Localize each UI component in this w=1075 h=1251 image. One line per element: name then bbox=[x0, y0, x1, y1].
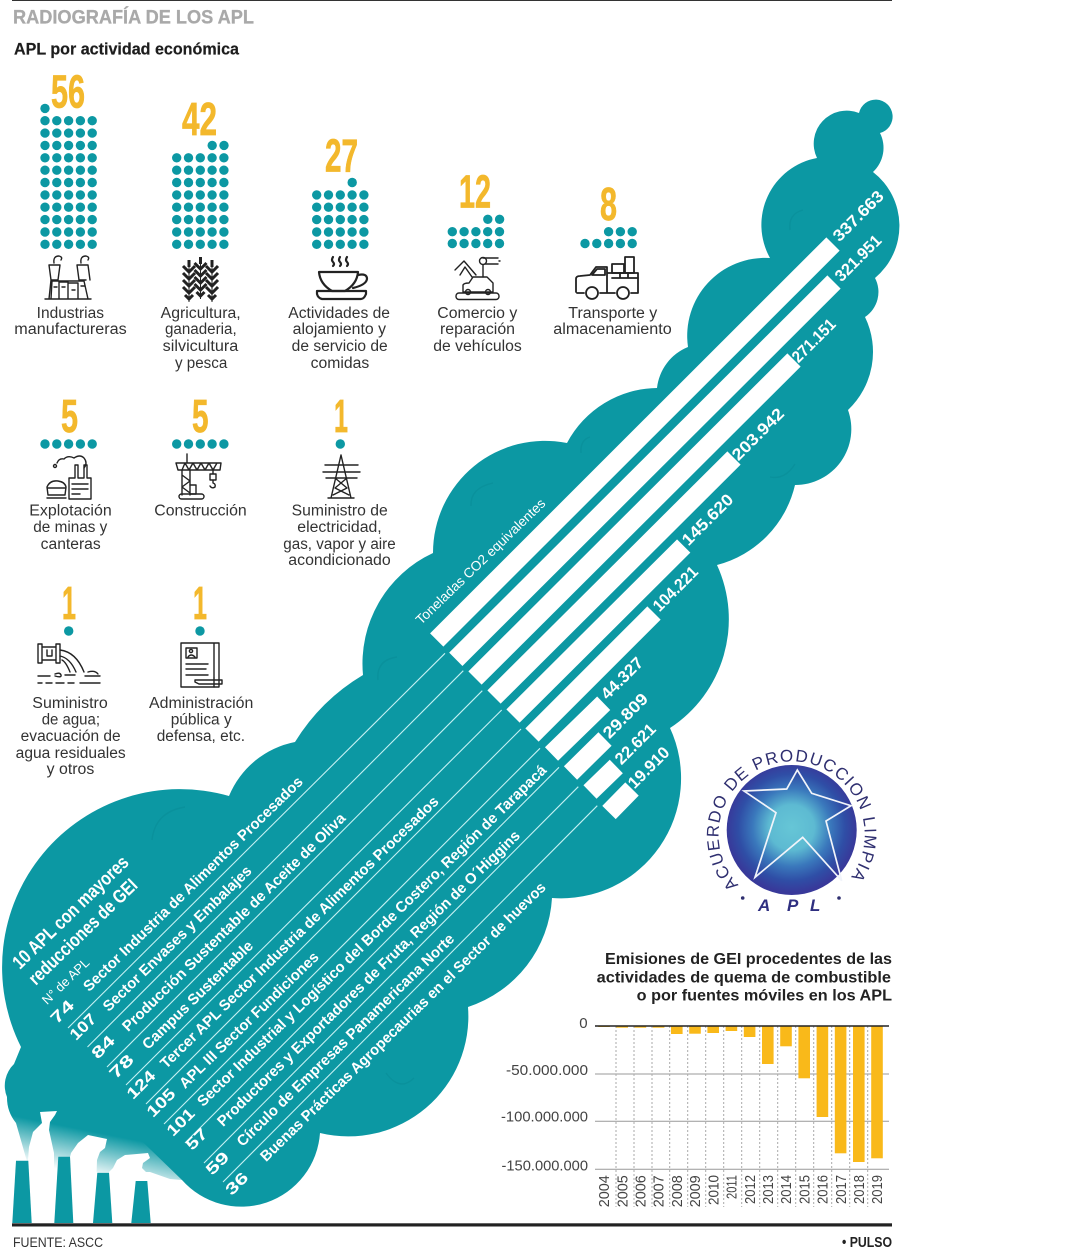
labels: row 1: reparación bbox=[440, 321, 515, 338]
labels: row 1: silvicultura bbox=[163, 338, 239, 355]
bars bbox=[598, 1026, 883, 1162]
labels: row 1: Actividades de bbox=[288, 305, 390, 322]
activity counts bbox=[51, 66, 617, 629]
labels: row 3: agua residuales bbox=[16, 745, 126, 762]
labels: row 1: almacenamiento bbox=[553, 321, 672, 338]
labels: row 1: comidas bbox=[311, 355, 370, 372]
activity counts: 1 bbox=[62, 577, 76, 629]
x axis years: 2008 bbox=[670, 1175, 686, 1207]
labels: row 3: pública y bbox=[171, 712, 232, 728]
list of 10 APL: Sector Industrial y Logístico del Borde Costero, Región de Tarapacá bbox=[194, 762, 551, 1110]
x axis years: 2019 bbox=[870, 1175, 886, 1204]
row divider lines bbox=[68, 653, 597, 1182]
list of 10 APL: 105 bbox=[144, 1086, 179, 1121]
x axis years: 2004 bbox=[597, 1175, 613, 1207]
bar value labels: 271.151 bbox=[789, 315, 840, 366]
chart title: o por fuentes móviles en los APL bbox=[637, 988, 892, 1005]
white smoke puffs bbox=[28, 1111, 150, 1223]
list of 10 APL: 101 bbox=[164, 1105, 199, 1140]
labels: row 3: Administración bbox=[149, 695, 253, 712]
x axis years: 2009 bbox=[688, 1175, 704, 1207]
list of 10 APL: 84 bbox=[89, 1032, 119, 1063]
cloud heading: 10 APL con mayores bbox=[9, 852, 133, 974]
list of 10 APL: Campus Sustentable bbox=[139, 938, 257, 1053]
icon: wheat bbox=[183, 257, 218, 302]
top rule bbox=[12, 0, 892, 1]
labels: row 2: Explotación bbox=[29, 503, 112, 520]
list of 10 APL: 59 bbox=[203, 1149, 233, 1179]
faint cloud folds bbox=[152, 210, 803, 1084]
x axis years: 2012 bbox=[743, 1175, 759, 1204]
brand: • PULSO bbox=[842, 1235, 892, 1251]
labels: row 3: de agua; bbox=[42, 712, 100, 728]
bar value labels: 29.809 bbox=[600, 690, 652, 742]
labels: row 1: alojamiento y bbox=[293, 321, 386, 338]
y axis labels: -50.000.000 bbox=[506, 1062, 588, 1079]
labels: row 2: canteras bbox=[41, 536, 101, 553]
list of 10 APL: Sector Industria de Alimentos Procesados bbox=[80, 773, 307, 995]
title: RADIOGRAFÍA DE LOS APL bbox=[13, 6, 254, 28]
labels: row 1: Transporte y bbox=[568, 305, 658, 322]
y axis labels: -150.000.000 bbox=[502, 1158, 588, 1175]
icon: car on assembly line bbox=[455, 258, 500, 300]
list of 10 APL: 124 bbox=[124, 1068, 159, 1103]
labels: row 2: de minas y bbox=[33, 519, 108, 536]
column label: APL number: N° de APL bbox=[39, 955, 92, 1007]
year separators bbox=[616, 1026, 868, 1207]
labels: row 1: de servicio de bbox=[292, 338, 388, 355]
labels: row 2: gas, vapor y aire bbox=[283, 536, 396, 553]
x axis years: 2015 bbox=[797, 1175, 813, 1204]
labels: row 1 bbox=[14, 305, 672, 372]
x axis years: 2014 bbox=[779, 1175, 795, 1204]
bar value labels: 337.663 bbox=[830, 187, 888, 245]
x axis years: 2011 bbox=[725, 1175, 741, 1199]
y axis labels: -100.000.000 bbox=[501, 1109, 588, 1126]
labels: row 2: electricidad, bbox=[297, 519, 382, 536]
list of 10 APL bbox=[48, 762, 551, 1199]
activity counts: 1 bbox=[193, 577, 207, 629]
labels: row 1: y pesca bbox=[175, 355, 228, 372]
list of 10 APL: Tercer APL Sector Industria de Alimentos Procesados bbox=[157, 793, 442, 1072]
bar value labels: 104.221 bbox=[650, 563, 702, 615]
labels: row 1: manufactureras bbox=[14, 321, 127, 338]
smoke cloud bbox=[0, 100, 899, 1235]
chimneys bbox=[12, 1157, 151, 1223]
list of 10 APL: 107 bbox=[67, 1011, 100, 1044]
icon: water discharge pipe bbox=[38, 644, 100, 683]
source: FUENTE: ASCC bbox=[13, 1234, 103, 1250]
x axis years: 2017 bbox=[834, 1175, 850, 1204]
activity counts: 1 bbox=[334, 390, 348, 442]
bar value labels: 19.910 bbox=[625, 744, 673, 792]
labels: row 1: Industrias bbox=[37, 305, 104, 322]
labels: row 3: Suministro bbox=[32, 695, 108, 712]
list of 10 APL: Buenas Prácticas Agropecaurias en el Sector de huevos bbox=[257, 879, 549, 1165]
logo: Acuerdo de Producción Limpia: ACUERDO DE PRODUCCION LIMPIA bbox=[706, 750, 876, 889]
bar value labels: 44.327 bbox=[598, 654, 647, 703]
labels: row 2: Suministro de bbox=[292, 503, 388, 520]
list of 10 APL: Círculo de Empresas Panamericana Norte bbox=[234, 930, 458, 1150]
list of 10 APL: Sector Envases y Embalajes bbox=[100, 863, 255, 1015]
labels: row 2: acondicionado bbox=[288, 552, 391, 569]
labels: row 1: Agricultura, bbox=[161, 305, 241, 322]
x axis years: 2007 bbox=[652, 1175, 668, 1207]
labels: row 2: Construcción bbox=[154, 503, 247, 520]
labels: row 3: y otros bbox=[47, 761, 95, 778]
list of 10 APL: 78 bbox=[106, 1051, 138, 1083]
x axis years: 2010 bbox=[706, 1175, 722, 1205]
chart title: actividades de quema de combustible bbox=[597, 970, 891, 987]
x axis years: 2018 bbox=[852, 1175, 868, 1204]
chart title: Emisiones de GEI procedentes de las bbox=[605, 951, 892, 968]
x axis years: 2006 bbox=[634, 1175, 650, 1207]
bar chart: GEI emissions bbox=[501, 1015, 889, 1207]
list of 10 APL: 36 bbox=[223, 1169, 252, 1199]
activity counts: 5 bbox=[61, 390, 78, 442]
labels: row 3: evacuación de bbox=[21, 728, 121, 745]
y axis labels bbox=[501, 1015, 588, 1175]
x axis years: 2005 bbox=[615, 1175, 631, 1207]
list of 10 APL: APL III Sector Fundiciones bbox=[176, 949, 322, 1092]
cloud heading: reducciones de GEI bbox=[25, 875, 142, 990]
icon: mining bbox=[47, 456, 91, 499]
list of 10 APL: 74 bbox=[48, 997, 78, 1028]
zero axis bbox=[595, 1025, 889, 1027]
subtitle: APL by economic activity: APL por actividad económica bbox=[14, 40, 240, 58]
bars: tonnes CO2 equivalent bbox=[437, 244, 834, 812]
icon: pickup truck bbox=[576, 257, 638, 299]
gridlines bbox=[595, 1074, 889, 1169]
dot columns bbox=[45, 108, 632, 631]
icon: notebook bbox=[181, 643, 222, 687]
x axis years: 2016 bbox=[816, 1175, 832, 1204]
icon: crane bbox=[176, 454, 221, 499]
labels: row 3 bbox=[16, 695, 253, 778]
activity counts: 12 bbox=[459, 165, 491, 217]
list of 10 APL: Producción Sustentable de Aceite de Oliva bbox=[119, 809, 350, 1035]
labels: row 1: de vehículos bbox=[433, 338, 522, 355]
y axis labels: 0 bbox=[579, 1015, 588, 1032]
icon: factory bbox=[45, 256, 91, 299]
smoke fade toward chimneys bbox=[0, 1090, 182, 1235]
icon: power tower bbox=[323, 455, 360, 498]
bar value labels bbox=[598, 187, 888, 792]
labels: row 1: Comercio y bbox=[437, 305, 518, 322]
x axis years bbox=[597, 1175, 886, 1207]
bar value labels: 22.621 bbox=[612, 720, 660, 768]
unit label: Toneladas CO2 equivalentes bbox=[413, 496, 549, 627]
list of 10 APL: Productores y Exportadores de Fruta, Región de O´Higgins bbox=[214, 827, 524, 1130]
activity counts: 8 bbox=[600, 178, 617, 230]
list of 10 APL: 57 bbox=[183, 1125, 212, 1154]
activity counts: 56 bbox=[51, 66, 85, 118]
activity counts: 27 bbox=[325, 130, 358, 182]
bottom rule bbox=[12, 1223, 892, 1226]
bar value labels: 203.942 bbox=[729, 405, 788, 464]
logo: Acuerdo de Producción Limpia: APL bbox=[757, 896, 820, 915]
chart title bbox=[597, 951, 892, 1005]
activity counts: 5 bbox=[192, 390, 208, 442]
bar value labels: 321.951 bbox=[832, 232, 885, 285]
x axis years: 2013 bbox=[761, 1175, 777, 1204]
bar value labels: 145.620 bbox=[679, 491, 737, 549]
labels: row 1: ganaderia, bbox=[165, 321, 237, 338]
labels: row 2 bbox=[29, 503, 396, 569]
icon: coffee cup bbox=[317, 257, 367, 299]
labels: row 3: defensa, etc. bbox=[157, 728, 245, 745]
activity counts: 42 bbox=[182, 93, 217, 145]
